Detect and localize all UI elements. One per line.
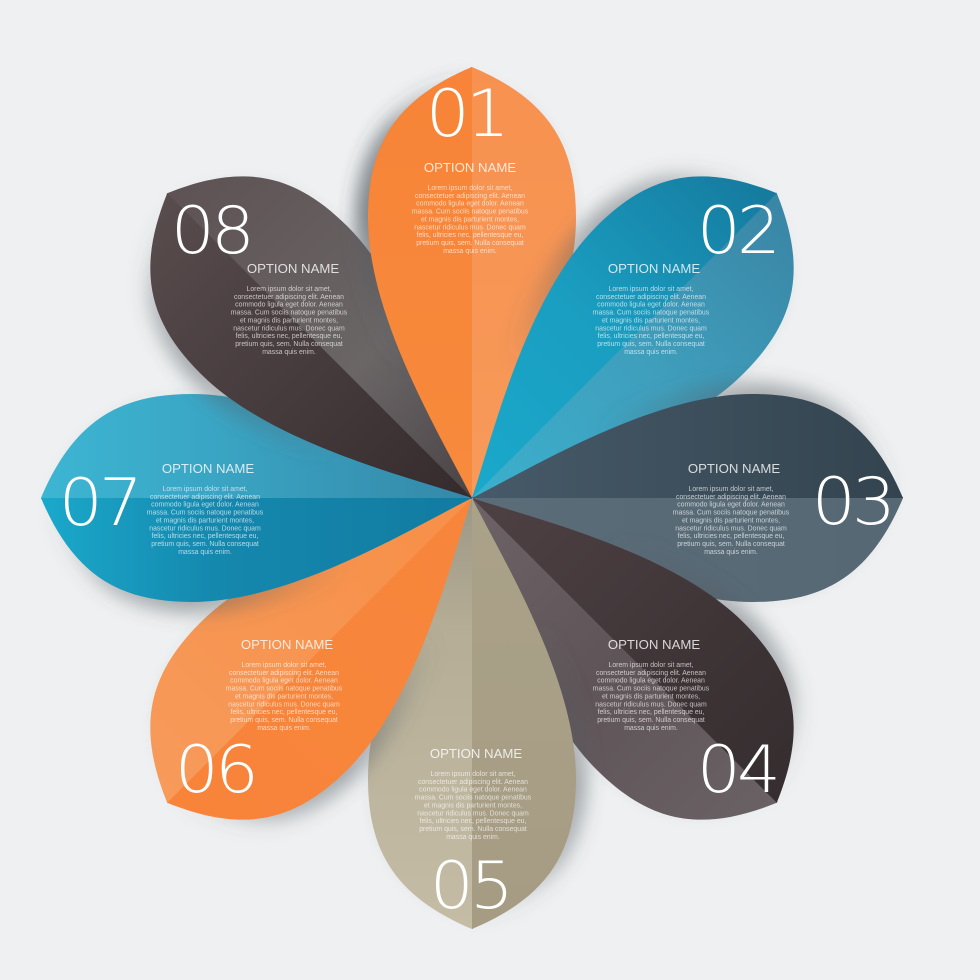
body option 05: commodo ligula eget dolor. Aenean xyxy=(419,787,527,794)
body option 05: massa quis enim. xyxy=(446,834,500,841)
heading option 02: OPTION NAME xyxy=(608,261,700,276)
option 02 text xyxy=(593,193,777,356)
body option 05: et magnis dis parturient montes, xyxy=(424,802,522,809)
body option 01: consectetuer adipiscing elit. Aenean xyxy=(415,193,525,200)
petal 01 left half over petal 08 xyxy=(346,68,472,498)
body option 02: massa quis enim. xyxy=(624,349,678,356)
body option 03: pretium quis, sem. Nulla consequat xyxy=(677,541,785,548)
body option 08: Lorem ipsum dolor sit amet, xyxy=(246,286,332,293)
body option 02: commodo ligula eget dolor. Aenean xyxy=(597,302,705,309)
option 05 text xyxy=(415,746,532,924)
body option 06: Lorem ipsum dolor sit amet, xyxy=(241,662,327,669)
body option 06: massa. Cum sociis natoque penatibus xyxy=(226,686,343,693)
petal 03 xyxy=(466,383,903,602)
body option 05: pretium quis, sem. Nulla consequat xyxy=(419,826,527,833)
petal 01 base xyxy=(357,67,576,504)
number 03: 03 xyxy=(812,464,892,540)
heading option 04: OPTION NAME xyxy=(608,637,700,652)
body option 07: commodo ligula eget dolor. Aenean xyxy=(151,502,259,509)
body option 06: felis, ultricies nec, pellentesque eu, xyxy=(231,709,338,716)
body option 07: nascetur ridiculus mus. Donec quam xyxy=(149,525,261,532)
body option 02: massa. Cum sociis natoque penatibus xyxy=(593,310,710,317)
number 04: 04 xyxy=(697,732,777,808)
body option 01: nascetur ridiculus mus. Donec quam xyxy=(414,224,526,231)
body option 07: felis, ultricies nec, pellentesque eu, xyxy=(152,533,259,540)
body option 08: massa. Cum sociis natoque penatibus xyxy=(231,310,348,317)
option 06 text xyxy=(175,637,343,808)
body option 04: et magnis dis parturient montes, xyxy=(602,693,700,700)
heading option 07: OPTION NAME xyxy=(162,461,254,476)
body option 06: consectetuer adipiscing elit. Aenean xyxy=(229,670,339,677)
number 07: 07 xyxy=(59,465,139,541)
body option 01: massa quis enim. xyxy=(443,248,497,255)
option 01 text xyxy=(412,76,529,255)
body option 07: Lorem ipsum dolor sit amet, xyxy=(162,486,248,493)
body option 05: consectetuer adipiscing elit. Aenean xyxy=(418,779,528,786)
body option 06: pretium quis, sem. Nulla consequat xyxy=(230,717,338,724)
body option 01: et magnis dis parturient montes, xyxy=(421,216,519,223)
body option 05: massa. Cum sociis natoque penatibus xyxy=(415,795,532,802)
body option 02: nascetur ridiculus mus. Donec quam xyxy=(595,325,707,332)
petal 05 xyxy=(368,492,587,929)
body option 01: pretium quis, sem. Nulla consequat xyxy=(416,240,524,247)
petal 08 xyxy=(86,120,550,584)
body option 05: Lorem ipsum dolor sit amet, xyxy=(430,771,516,778)
body option 03: massa. Cum sociis natoque penatibus xyxy=(673,510,790,517)
option 04 text xyxy=(593,637,777,808)
body option 02: pretium quis, sem. Nulla consequat xyxy=(597,341,705,348)
body option 04: massa quis enim. xyxy=(624,725,678,732)
heading option 08: OPTION NAME xyxy=(247,261,339,276)
body option 04: felis, ultricies nec, pellentesque eu, xyxy=(598,709,705,716)
body option 07: pretium quis, sem. Nulla consequat xyxy=(151,541,259,548)
body option 08: massa quis enim. xyxy=(262,349,316,356)
body option 08: commodo ligula eget dolor. Aenean xyxy=(235,302,343,309)
body option 03: felis, ultricies nec, pellentesque eu, xyxy=(678,533,785,540)
heading option 05: OPTION NAME xyxy=(430,746,522,761)
body option 01: commodo ligula eget dolor. Aenean xyxy=(416,201,524,208)
number 02: 02 xyxy=(697,193,777,269)
body option 04: Lorem ipsum dolor sit amet, xyxy=(608,662,694,669)
number 05: 05 xyxy=(430,848,510,924)
body option 04: commodo ligula eget dolor. Aenean xyxy=(597,678,705,685)
body option 08: nascetur ridiculus mus. Donec quam xyxy=(233,325,345,332)
body option 04: nascetur ridiculus mus. Donec quam xyxy=(595,701,707,708)
body option 06: et magnis dis parturient montes, xyxy=(235,693,333,700)
body option 01: felis, ultricies nec, pellentesque eu, xyxy=(417,232,524,239)
body option 08: felis, ultricies nec, pellentesque eu, xyxy=(236,333,343,340)
heading option 01: OPTION NAME xyxy=(424,160,516,175)
body option 03: Lorem ipsum dolor sit amet, xyxy=(688,486,774,493)
flower: eight overlapping petals xyxy=(41,67,903,929)
body option 01: Lorem ipsum dolor sit amet, xyxy=(427,185,513,192)
body option 05: felis, ultricies nec, pellentesque eu, xyxy=(420,818,527,825)
option 07 text xyxy=(59,461,264,556)
body option 04: consectetuer adipiscing elit. Aenean xyxy=(596,670,706,677)
body option 03: et magnis dis parturient montes, xyxy=(682,517,780,524)
body option 02: Lorem ipsum dolor sit amet, xyxy=(608,286,694,293)
body option 03: consectetuer adipiscing elit. Aenean xyxy=(676,494,786,501)
body option 07: et magnis dis parturient montes, xyxy=(156,517,254,524)
body option 05: nascetur ridiculus mus. Donec quam xyxy=(417,810,529,817)
body option 08: pretium quis, sem. Nulla consequat xyxy=(235,341,343,348)
option 03 text xyxy=(673,461,892,556)
body option 04: massa. Cum sociis natoque penatibus xyxy=(593,686,710,693)
body option 04: pretium quis, sem. Nulla consequat xyxy=(597,717,705,724)
body option 08: et magnis dis parturient montes, xyxy=(240,317,338,324)
body option 03: massa quis enim. xyxy=(704,549,758,556)
petal 07 xyxy=(41,394,478,613)
body option 03: nascetur ridiculus mus. Donec quam xyxy=(675,525,787,532)
body option 06: commodo ligula eget dolor. Aenean xyxy=(230,678,338,685)
body option 02: consectetuer adipiscing elit. Aenean xyxy=(596,294,706,301)
body option 07: massa quis enim. xyxy=(178,549,232,556)
petal 06 xyxy=(94,420,558,884)
body option 02: et magnis dis parturient montes, xyxy=(602,317,700,324)
body option 02: felis, ultricies nec, pellentesque eu, xyxy=(598,333,705,340)
petal 02 xyxy=(386,112,850,576)
body option 01: massa. Cum sociis natoque penatibus xyxy=(412,209,529,216)
body option 06: massa quis enim. xyxy=(257,725,311,732)
number 08: 08 xyxy=(171,193,251,269)
number 06: 06 xyxy=(175,732,255,808)
heading option 06: OPTION NAME xyxy=(241,637,333,652)
body option 07: consectetuer adipiscing elit. Aenean xyxy=(150,494,260,501)
option 08 text xyxy=(171,193,348,356)
body option 06: nascetur ridiculus mus. Donec quam xyxy=(228,701,340,708)
number 01: 01 xyxy=(426,76,506,152)
heading option 03: OPTION NAME xyxy=(688,461,780,476)
body option 08: consectetuer adipiscing elit. Aenean xyxy=(234,294,344,301)
body option 07: massa. Cum sociis natoque penatibus xyxy=(147,510,264,517)
body option 03: commodo ligula eget dolor. Aenean xyxy=(677,502,785,509)
petal 04 xyxy=(394,412,858,876)
